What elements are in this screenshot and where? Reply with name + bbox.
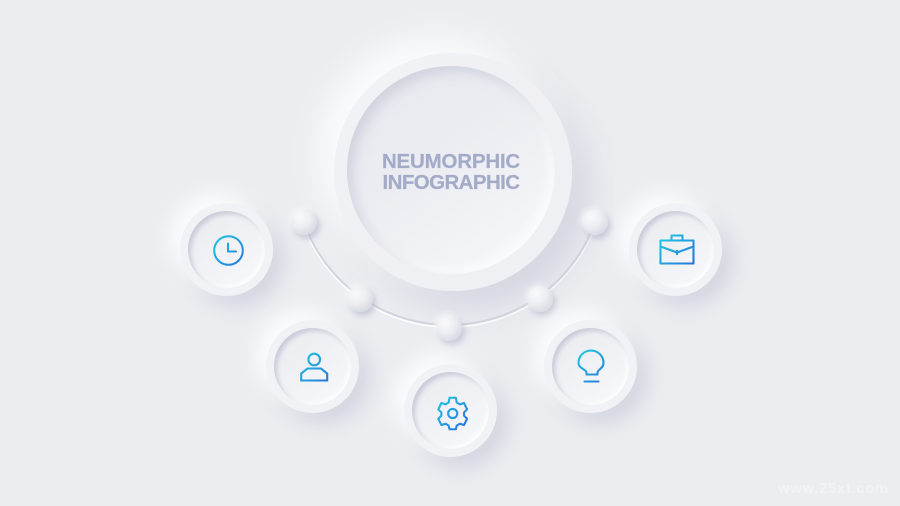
connector ball 4 (527, 286, 553, 312)
main circle outer ring (334, 52, 572, 290)
icon: clock (213, 235, 244, 266)
node: person (266, 320, 359, 413)
connector ball 5 (582, 209, 608, 235)
watermark: www.25xt.com (778, 480, 889, 497)
node: clock (180, 203, 273, 296)
title: NEUMORPHIC (382, 150, 520, 173)
title (382, 150, 520, 194)
node: gear (404, 364, 497, 457)
icon: person (300, 352, 328, 382)
icon: gear (437, 396, 468, 430)
connector ball 2 (347, 286, 373, 312)
title: INFOGRAPHIC (383, 170, 519, 194)
icon: light bulb (577, 350, 605, 382)
connector ball 1 (291, 209, 317, 235)
node: light bulb (544, 320, 637, 413)
node: briefcase (629, 203, 722, 296)
main circle inner disc (347, 66, 555, 274)
icon: briefcase (659, 234, 695, 264)
connector ball 3 (436, 315, 462, 341)
